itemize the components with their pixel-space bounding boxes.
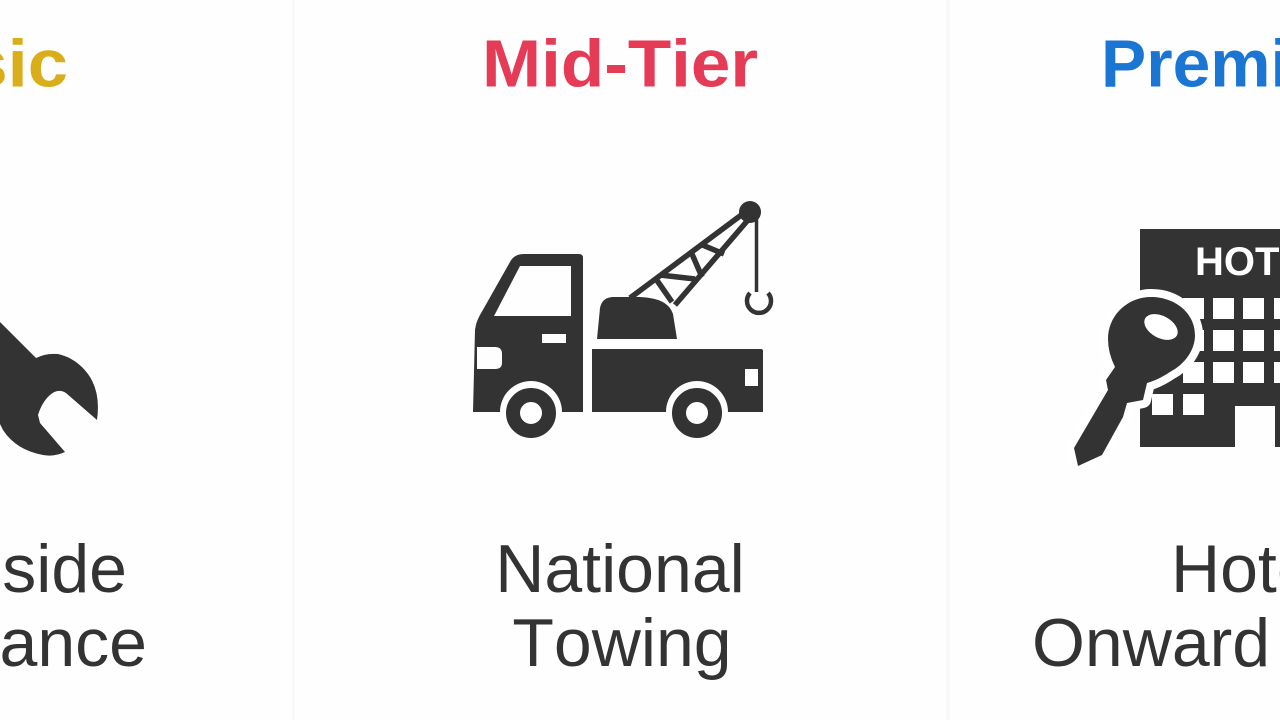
panel: basic tier <box>0 26 147 681</box>
text: Roadside Assistance <box>0 531 147 681</box>
text: National Towing: Towing <box>512 605 732 681</box>
text: National Towing <box>495 531 745 681</box>
panel: premium tier <box>1032 26 1280 681</box>
panel: mid-tier <box>473 26 771 681</box>
icon: hotel and key <box>1074 229 1280 466</box>
front wheel <box>513 395 549 431</box>
text: National Towing: National <box>495 531 745 607</box>
heading: Mid-Tier: Mid-Tier <box>482 26 758 102</box>
rear wheel <box>679 395 715 431</box>
hook <box>747 212 771 313</box>
crane base <box>597 297 677 339</box>
boom tip <box>739 201 761 223</box>
key <box>1074 297 1195 466</box>
text: Hotel Onward Travel <box>1032 531 1280 681</box>
truck bed <box>592 349 763 412</box>
hotel building <box>1140 229 1280 447</box>
truck cab <box>473 254 583 412</box>
icon: tow truck <box>473 201 771 431</box>
icon: wrench <box>0 320 98 456</box>
crane boom <box>630 213 748 305</box>
key hole <box>1140 309 1182 345</box>
hotel windows <box>1152 298 1280 415</box>
